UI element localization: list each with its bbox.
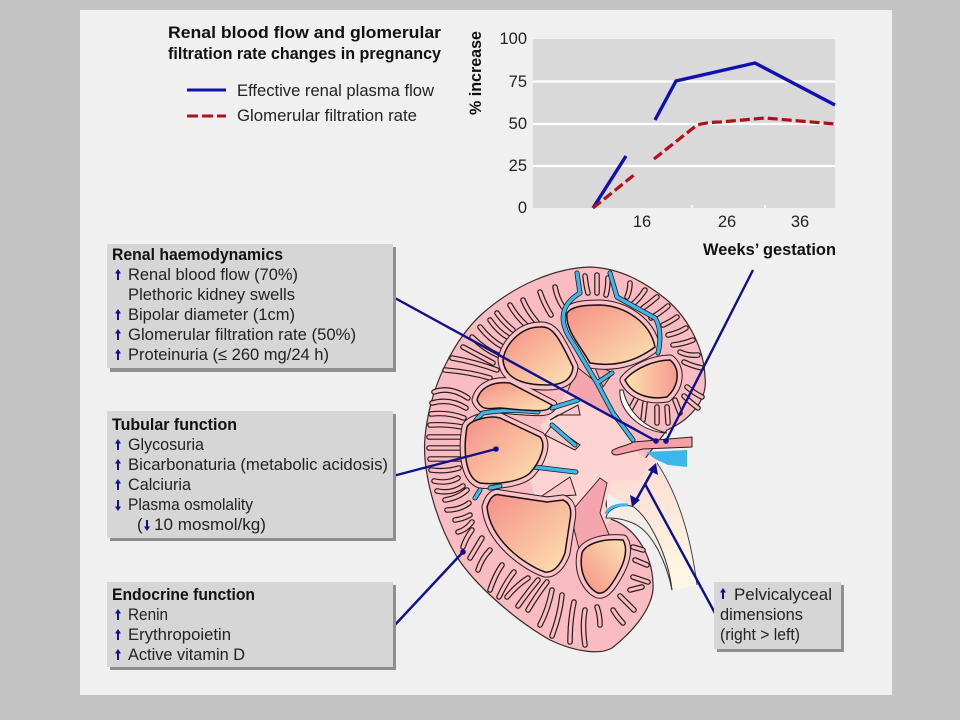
panel: renal haemodynamics: Plethoric kidney swells (128, 286, 295, 304)
y axis labels (499, 30, 527, 217)
panel: tubular function: Calciuria (128, 476, 192, 494)
pyramids (465, 305, 677, 593)
double-headed arrow (630, 463, 658, 507)
chart legend: Effective renal plasma flow (237, 82, 434, 100)
blue veins (470, 273, 660, 498)
x axis title: Weeks’ gestation (703, 241, 836, 259)
renal artery (612, 437, 692, 455)
panel: renal haemodynamics: Proteinuria (≤ 260 mg/24 h) (128, 346, 329, 364)
x axis labels: 36 (791, 213, 809, 231)
panel: endocrine function: Renin (128, 606, 168, 624)
filtration rate line (593, 118, 835, 208)
renal plasma flow line (593, 63, 835, 208)
x axis labels (633, 213, 809, 231)
line chart (467, 30, 836, 259)
y axis labels: 100 (499, 30, 527, 48)
x axis labels: 16 (633, 213, 651, 231)
panel: tubular function: Tubular function (112, 416, 237, 434)
white crescent (620, 390, 667, 433)
leader lines (393, 270, 753, 627)
pyramid rings (465, 305, 677, 593)
y axis labels: 50 (509, 115, 527, 133)
panel: endocrine function: Erythropoietin (128, 626, 231, 644)
y axis labels: 0 (518, 199, 527, 217)
plot area (533, 39, 835, 208)
panel: pelvicalyceal dimensions (714, 582, 844, 652)
renal vein (646, 450, 687, 467)
dark sinus wedges (567, 363, 613, 553)
panel: tubular function: 10 mosmol/kg) (154, 516, 266, 534)
panel: pelvicalyceal dimensions: (right > left) (720, 626, 800, 644)
chart legend (187, 82, 434, 125)
panel: endocrine function: Active vitamin D (128, 646, 245, 664)
panel: endocrine function (107, 582, 396, 670)
y axis title: % increase (467, 31, 485, 115)
panel: renal haemodynamics: Glomerular filtration rate (50%) (128, 326, 356, 344)
panel: renal haemodynamics: Bipolar diameter (1cm) (128, 306, 295, 324)
chart title: filtration rate changes in pregnancy (168, 45, 442, 63)
panel: pelvicalyceal dimensions: Pelvicalyceal (734, 586, 832, 604)
panel: pelvicalyceal dimensions: dimensions (720, 606, 803, 624)
panel: endocrine function: Endocrine function (112, 586, 255, 604)
panel: tubular function (107, 411, 396, 541)
x axis labels: 26 (718, 213, 736, 231)
panel: tubular function: Plasma osmolality (128, 496, 254, 514)
panel: tubular function: Glycosuria (128, 436, 205, 454)
ureter tube (606, 505, 672, 590)
kidney body (425, 267, 705, 652)
chart title: Renal blood flow and glomerular (168, 24, 442, 42)
panel: renal haemodynamics: Renal haemodynamics (112, 246, 283, 264)
kidney illustration (425, 267, 705, 652)
chart legend: Glomerular filtration rate (237, 107, 417, 125)
panel: tubular function: ( (137, 516, 143, 534)
panel: tubular function: Bicarbonaturia (metabolic acidosis) (128, 456, 388, 474)
ureter and pelvis (600, 450, 697, 590)
panel: renal haemodynamics: Renal blood flow (70%) (128, 266, 298, 284)
panel: renal haemodynamics (107, 244, 396, 372)
y axis labels: 25 (509, 157, 527, 175)
y axis labels: 75 (509, 73, 527, 91)
calyx wedges (533, 405, 580, 502)
chart title (168, 24, 442, 63)
renal sinus (530, 367, 650, 550)
cortical tubules (429, 275, 702, 645)
